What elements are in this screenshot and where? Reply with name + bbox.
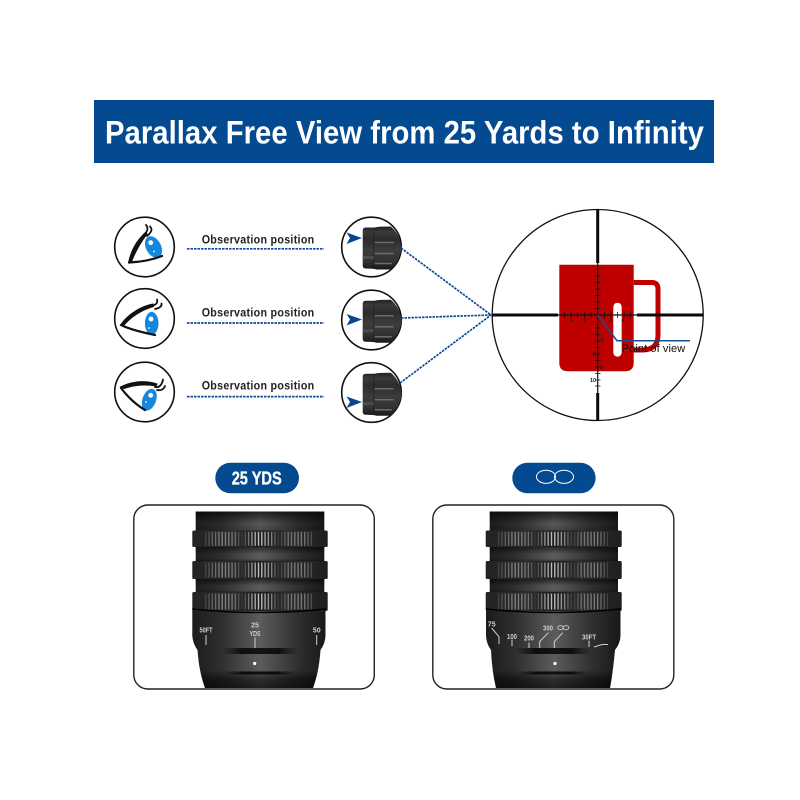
distance scale infinity: 100	[507, 634, 517, 641]
scope body	[486, 512, 622, 688]
distance scale 25 yds: YDS	[250, 631, 261, 638]
distance scale infinity: 30FT	[582, 634, 597, 642]
distance scale 25 yds: 25	[251, 622, 259, 630]
distance scale infinity: 75	[488, 622, 496, 628]
reticle numbers	[569, 318, 625, 384]
icon: eye looking from above	[115, 362, 174, 422]
knob icon 3	[342, 363, 402, 422]
red mug target	[559, 265, 658, 371]
reticle numbers: 4	[600, 338, 604, 344]
reticle numbers: 8	[600, 365, 603, 371]
reticle numbers: 2	[609, 318, 612, 324]
pill: 25 YDS: 25 YDS	[232, 467, 282, 488]
reticle numbers: 6	[592, 352, 596, 358]
observation label row 2	[187, 307, 324, 323]
dashed sight lines to reticle	[400, 248, 491, 383]
distance scale infinity	[488, 622, 608, 665]
icon: eye looking from below	[115, 217, 174, 277]
observation label row 3: Observation position	[202, 380, 314, 393]
observation label row 3	[187, 380, 324, 397]
distance scale infinity: 300	[543, 626, 553, 632]
distance scale infinity: 200	[524, 636, 534, 642]
reticle numbers: 4	[569, 318, 573, 324]
reticle numbers: 2	[583, 318, 586, 324]
reticle view	[492, 210, 703, 420]
pill: 25 YDS	[215, 463, 299, 493]
scope body	[192, 512, 328, 688]
panel: scope at 25 yards	[134, 505, 374, 689]
knob icon 2	[342, 290, 402, 350]
distance scale 25 yds: 50FT	[200, 628, 213, 634]
banner	[94, 100, 714, 163]
point of view callout: Point of view	[622, 343, 685, 355]
icon: eye looking level	[115, 289, 174, 348]
distance scale 25 yds	[200, 622, 321, 665]
pill: infinity	[512, 463, 596, 493]
knob icon 1	[342, 217, 402, 277]
banner title: Parallax Free View from 25 Yards to Infinity	[105, 114, 705, 151]
observation label row 2: Observation position	[202, 307, 314, 320]
distance scale 25 yds: 50	[313, 628, 321, 634]
reticle numbers: 10	[590, 378, 596, 384]
reticle numbers: 4	[621, 318, 625, 324]
point of view callout	[598, 315, 690, 355]
observation label row 1: Observation position	[202, 234, 314, 247]
panel: scope at infinity	[433, 505, 674, 689]
crosshair	[492, 210, 703, 420]
